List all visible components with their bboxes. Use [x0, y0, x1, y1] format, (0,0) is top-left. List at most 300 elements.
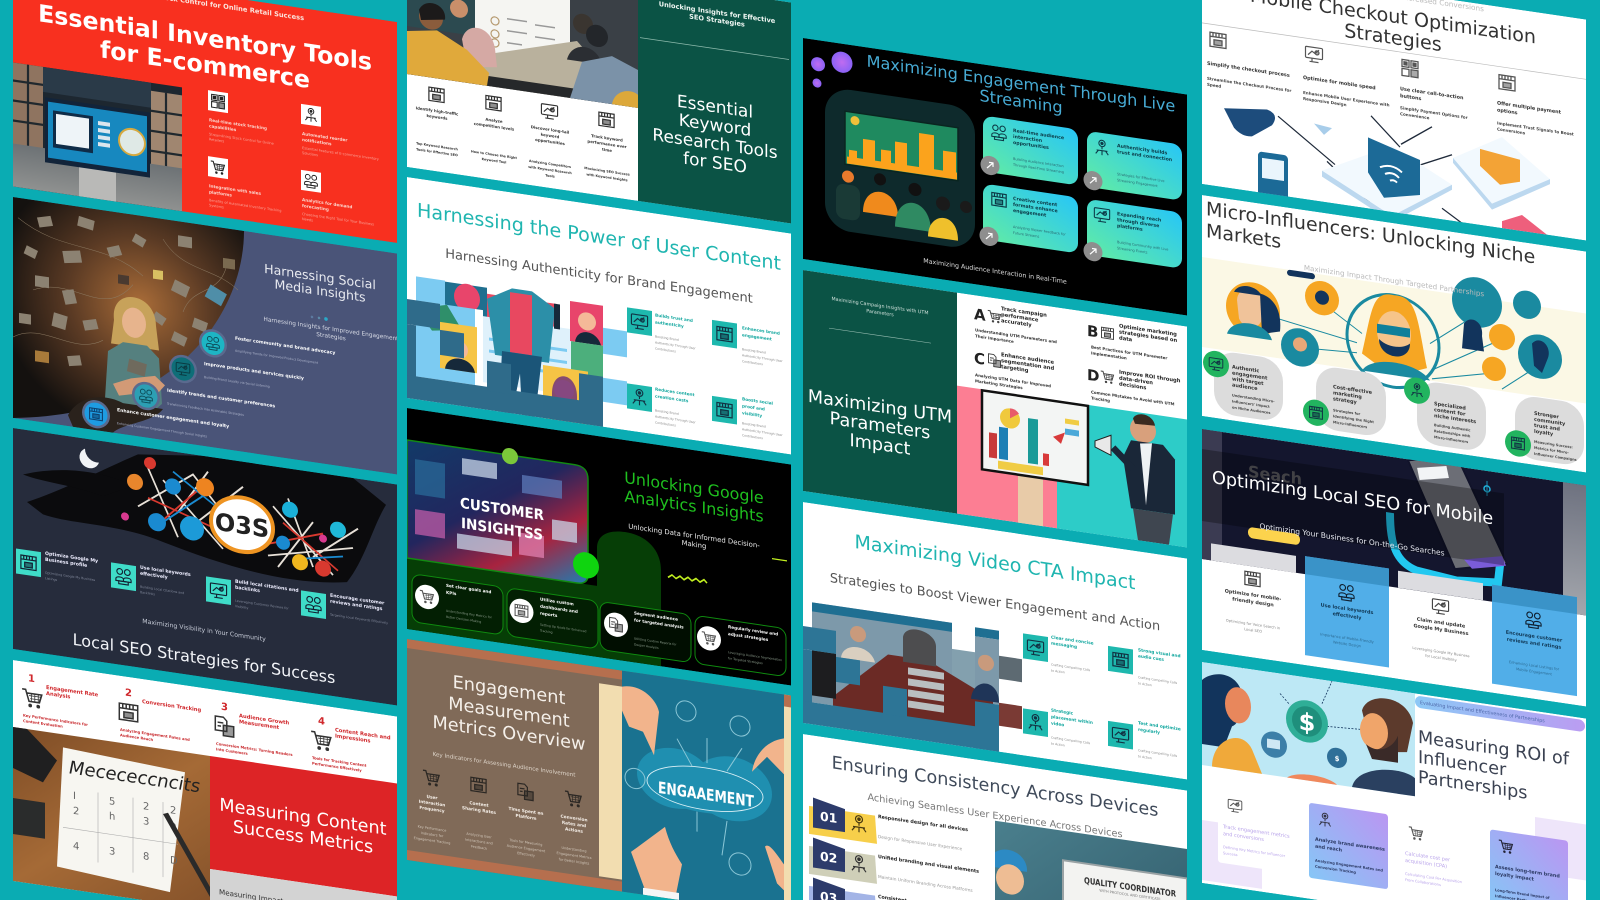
- item: reorder: notifications: [302, 137, 332, 146]
- item: stock tracking: Real-time stock tracking: [209, 117, 267, 131]
- image: metrics notepad on desk: 2: [73, 806, 79, 818]
- item: stock tracking: capabilities: [209, 123, 237, 132]
- red title block: Success Metrics: [233, 817, 373, 858]
- item: high-traffic: Tools for Effective SEO: [416, 147, 458, 157]
- panel: Unlocking Google Analytics Insights: [407, 408, 791, 685]
- item: social proof: Boosts social: [742, 396, 774, 406]
- item: stock tracking: Streamlining Stock Control for Online: [209, 132, 274, 146]
- item: reorder: Automated reorder: [302, 131, 348, 143]
- item: forecasting: forecasting: [302, 203, 329, 212]
- item: time spent: Audience Engagement: [507, 844, 546, 853]
- item: time spent: Effectively: [517, 851, 535, 858]
- item: authentic engagement: audience: [1232, 382, 1258, 392]
- item: test optimize: regularly: [1138, 727, 1160, 736]
- item: keywords: Website Design: [1333, 640, 1361, 648]
- item: CTA messaging: messaging: [1051, 640, 1077, 650]
- card: creative: Analyzing Viewer Feedback for: [1013, 225, 1066, 237]
- image: engagement hands: [622, 671, 791, 900]
- item: loyalty: [82, 400, 229, 438]
- illustration: woman, man and dollar coin: $: [1335, 754, 1340, 763]
- item: cost-effective: [1303, 363, 1386, 438]
- item: dashboards: Tracking: [539, 628, 553, 634]
- item: segments: [600, 601, 691, 663]
- subtitle: Harnessing Insights for Improved Engagement: [264, 317, 399, 343]
- item: reviews: reviews and ratings: [330, 599, 383, 612]
- image: phone search scene: Seach: [1248, 462, 1302, 489]
- card: real-time: Building Audience Interaction: [1013, 157, 1064, 168]
- item: interaction: [414, 769, 450, 845]
- row 03: [809, 877, 938, 900]
- item D: Common Mistakes to Avoid with UTM: [1091, 389, 1174, 407]
- item: simplify: Streamline the Checkout Process for: [1207, 76, 1292, 93]
- item: time spent: Tools for Measuring: [509, 838, 542, 847]
- item: loyalty: Enhancing Customer Engagement Through Social Insights: [117, 421, 207, 439]
- image: metrics notepad on desk: 3: [109, 846, 115, 858]
- item: reorder: Essential Features of E-commerce Inventory: [302, 146, 379, 161]
- left title block: Maximizing Campaign Insights with UTM: [832, 296, 928, 316]
- image: metrics notepad on desk: 4: [73, 841, 79, 853]
- item B: Best Practices for UTM Parameter: [1091, 344, 1167, 361]
- item: track performance: with Keyword Insights: [586, 172, 628, 182]
- panel side: green title: Keyword: [679, 111, 751, 141]
- item: forecasting: Needs: [302, 217, 313, 223]
- card: reach: [1084, 198, 1182, 274]
- item 1: engagement rate: Analysis: [46, 691, 70, 700]
- item: reviews: Targeting Local Keywords Effectively: [329, 612, 388, 625]
- item: authentic engagement: Authentic: [1232, 364, 1259, 374]
- subtitle: Making: [682, 539, 706, 551]
- item B: strategies based on: [1119, 329, 1177, 344]
- image: metrics notepad on desk: 2: [143, 801, 149, 813]
- item: specialized: Building Authentic: [1434, 423, 1470, 432]
- item: sharing: Feedback: [471, 844, 487, 851]
- item: strategic placement: video: [1051, 720, 1064, 728]
- item: dashboards: dashboards and: [540, 604, 578, 614]
- card: creative: [980, 183, 1078, 259]
- item: local keywords: Building Local Citations and: [140, 585, 184, 595]
- item: authentic engagement: Understanding Micro-: [1232, 393, 1275, 404]
- item D: decisions: [1119, 381, 1146, 391]
- item: payments: [1497, 74, 1574, 143]
- row 01: Responsive design for all devices: [878, 814, 968, 833]
- item A: [974, 302, 1057, 350]
- item: simplify: [1207, 32, 1292, 99]
- squiggle: [668, 543, 787, 595]
- item: citations: Leveraging Customer Reviews for: [235, 599, 289, 611]
- item 3: audience growth: Audience Growth: [239, 713, 289, 727]
- item: social proof: visibility: [742, 410, 762, 418]
- dots: [311, 315, 328, 321]
- item: competition: Analyze: [485, 117, 503, 124]
- pill subtitle: Evaluating Impact and Effectiveness of Partnerships: [1420, 700, 1545, 724]
- item: dashboards: Setting Up Goals for Enhanced: [540, 623, 587, 633]
- title: for E-commerce: [100, 35, 310, 94]
- image: metrics notepad on desk: 3: [143, 816, 149, 828]
- panel: Measuring Content Success Metrics: [13, 660, 397, 900]
- item: google profile: [16, 548, 98, 582]
- item: long-tail: with Keyword Research: [528, 165, 572, 175]
- item: engagement: Contributions: [742, 359, 763, 366]
- item A: Their Importance: [975, 333, 1014, 344]
- item: speed: Enhance Mobile User Experience with: [1303, 90, 1390, 108]
- subtitle: Harnessing Authenticity for Brand Engagement: [445, 247, 753, 307]
- title: Harnessing the Power of User Content: [417, 199, 781, 275]
- card: authenticity: trust and connection: [1117, 149, 1172, 163]
- item: strategic placement: [1023, 703, 1093, 752]
- item: specialized: [1404, 376, 1486, 453]
- item: engagement: [712, 320, 783, 369]
- item: cost-effective: Cost-effective: [1333, 384, 1373, 396]
- item: time spent: [507, 782, 546, 859]
- item: mobile-friendly: Optimizing for Voice Search in: [1226, 619, 1280, 630]
- item C: segmentation and: [1001, 358, 1054, 372]
- caption: Maximizing Audience Interaction in Real-Time: [923, 258, 1067, 286]
- illustration: influencer network: [1202, 237, 1586, 415]
- item: competition: [471, 93, 517, 166]
- title: Media Insights: [274, 277, 366, 305]
- item: advocacy: Foster community and brand advocacy: [235, 336, 335, 356]
- item: content costs: Authenticity Through User: [655, 414, 696, 425]
- item: reviews: [1492, 585, 1577, 696]
- item: conversion: Rates and: [562, 820, 586, 829]
- item A: accurately: [1001, 318, 1032, 329]
- item: test optimize: Crafting Compelling Calls: [1138, 748, 1178, 758]
- image: metrics notepad on desk: 5: [109, 796, 115, 808]
- image: customer insights dashboard: INSIGHTSS: [461, 515, 543, 544]
- item: reviews: Mobile Engagement: [1516, 667, 1552, 677]
- item: track engagement: [1202, 790, 1290, 893]
- panel: Engagement Measurement Metrics Overview: [407, 639, 791, 900]
- item 3: audience growth: Conversion Metrics: Turning Readers: [216, 742, 293, 757]
- item: specialized: Relationships with: [1434, 429, 1471, 439]
- item: goals: Better Decision-Making: [446, 615, 481, 624]
- item: social proof: proof and: [742, 403, 765, 412]
- panel side: green title: Essential: [677, 92, 753, 123]
- item: speed: Responsive Design: [1303, 96, 1347, 107]
- image: metrics notepad on desk: D: [170, 855, 178, 867]
- item: visual audio: Crafting Compelling Calls: [1138, 675, 1178, 685]
- item: visual audio: [1108, 643, 1181, 691]
- item: sharing: Interactions and: [465, 838, 493, 846]
- item: competition: How to Choose the Right: [471, 149, 517, 160]
- panel: Ensuring Consistency Across Devices: [803, 734, 1187, 900]
- title: Unlocking Google: [624, 468, 764, 507]
- item: trends: [132, 382, 275, 416]
- item 2: conversion tracking: Analyzing Engagement Rates and: [120, 728, 190, 742]
- item 1: engagement rate: Key Performance Indicators for: [23, 713, 88, 727]
- item: sharing: Sharing Rates: [462, 805, 496, 816]
- item: trust: Builds trust and: [655, 312, 693, 323]
- item: social proof: [712, 392, 783, 443]
- item: interaction: Engagement Tracking: [414, 836, 450, 845]
- item: sharing: [462, 776, 496, 852]
- illustration: woman, man and dollar coin: [1202, 657, 1415, 796]
- card: reach: Streaming Events: [1117, 246, 1148, 255]
- item: sales integration: [208, 156, 281, 218]
- item: community: Stronger: [1534, 411, 1559, 421]
- pill subtitle: [1415, 695, 1585, 732]
- item: forecasting: Analytics for demand: [302, 197, 352, 209]
- item: speed: [1303, 46, 1390, 114]
- row 02: Unified branding and visual elements: [878, 854, 979, 875]
- item: google business: Claim and update: [1417, 617, 1466, 630]
- item: analyze brand: [1309, 803, 1388, 889]
- item: loyalty impact: Long-Term Brand Impact of: [1495, 888, 1550, 900]
- item: analyze brand: Analyze brand awareness: [1315, 837, 1385, 853]
- panel side: green title: for SEO: [683, 149, 747, 178]
- item: cost per acquisition: From Collaborations: [1405, 878, 1441, 887]
- item: specialized: niche interests: [1434, 413, 1476, 425]
- item: analyze brand: and reach: [1315, 844, 1343, 854]
- row 01: 01: [820, 809, 837, 826]
- item: reviews: Enhancing Local Listings for: [1509, 660, 1560, 672]
- item: goals: [412, 574, 503, 635]
- item: analyze brand: Conversion Tracking: [1315, 865, 1356, 875]
- item 2: conversion tracking: Audience Reach: [120, 733, 153, 742]
- panel: Optimizing Local SEO for Mobile: [1202, 419, 1586, 706]
- item: keywords: Use local keywords: [1321, 602, 1373, 616]
- item: content costs: Boosting Brand: [655, 408, 679, 416]
- panel: Maximizing Engagement Through Live Streaming: [803, 38, 1187, 315]
- image: metrics notepad on desk: b: [170, 820, 176, 832]
- card: creative: formats enhance: [1013, 202, 1058, 214]
- cream column: [599, 683, 622, 880]
- card: authenticity: Strategies for Effective Live: [1117, 172, 1165, 183]
- item: dashboards: [507, 588, 598, 649]
- panel: Essential Inventory Tools for E-commerce: [13, 0, 397, 243]
- subtitle: Optimizing Your Business for On-the-Go Searches: [1259, 521, 1445, 558]
- card: real-time: Through Real-Time Streaming: [1012, 163, 1064, 174]
- item: CTA: Simplify Payment Options for: [1400, 105, 1469, 120]
- item: visual audio: to Action: [1138, 681, 1152, 687]
- item: test optimize: to Action: [1138, 754, 1152, 760]
- item: improve products: [169, 354, 304, 388]
- item: review: Regularly review and: [728, 624, 778, 637]
- item D: data-driven: [1119, 375, 1153, 386]
- title: Engagement: [453, 672, 565, 709]
- item 1: engagement rate: Content Evaluation: [23, 719, 63, 729]
- red title block: [210, 756, 397, 896]
- item: content costs: Contributions: [655, 420, 676, 428]
- item: goals: Set clear goals and: [446, 583, 491, 594]
- subtitle: Key Indicators for Assessing Audience Involvement: [433, 752, 576, 779]
- item: cost-effective: strategy: [1333, 396, 1357, 406]
- item: local keywords: effectively: [140, 571, 168, 581]
- image: woman surrounded by photos: [13, 197, 244, 452]
- item: community: community: [1534, 417, 1566, 427]
- title: Partnerships: [1418, 768, 1527, 804]
- item: google business: for Local Visibility: [1425, 654, 1458, 663]
- item: strategic placement: placement within: [1051, 714, 1093, 726]
- item 3: audience growth: 3: [221, 702, 228, 714]
- panel: Essential Keyword Research Tools: [407, 0, 791, 223]
- item: community: Measuring Success:: [1534, 440, 1573, 450]
- item: sharing: Content: [469, 800, 489, 809]
- item: local keywords: Backlinks: [140, 590, 155, 596]
- green band: [407, 500, 661, 666]
- left title block: [803, 270, 957, 514]
- item C: C: [974, 349, 985, 369]
- item: dashboards: Utilize custom: [540, 597, 574, 607]
- item: social proof: Contributions: [742, 433, 763, 440]
- panel: Maximizing UTM Parameters Impact: [803, 270, 1187, 547]
- item: trust: Authenticity Through User: [655, 340, 696, 351]
- item 4: content reach: 4: [318, 716, 325, 728]
- item: authentic engagement: engagement: [1232, 370, 1268, 382]
- left title block: Maximizing UTM: [808, 387, 952, 428]
- item B: B: [1087, 322, 1098, 341]
- item: conversion: Actions: [565, 826, 583, 835]
- item B: data: [1119, 335, 1133, 343]
- item: high-traffic: Identify high-traffic: [416, 105, 459, 117]
- item: long-tail: Analyzing Competitors: [529, 159, 571, 169]
- item 3: audience growth: Measurement: [239, 719, 280, 731]
- decorative stripes: [407, 639, 622, 892]
- item: cost-effective: Identifying the Right: [1333, 414, 1374, 424]
- item: cost per acquisition: acquisition (CPA): [1405, 858, 1447, 870]
- item: content costs: creation costs: [655, 393, 689, 403]
- title: Micro-Influencers: Unlocking Niche: [1206, 197, 1535, 268]
- item 3: audience growth: Into Customers: [216, 747, 249, 756]
- panel side: green title: Research Tools: [652, 125, 778, 163]
- item: authentic engagement: with target: [1232, 376, 1264, 387]
- row 01: [809, 797, 968, 857]
- item: google business: [1398, 571, 1483, 666]
- item: segments: for targeted analysis: [634, 617, 684, 630]
- item: authentic engagement: Influencers' Impact: [1232, 399, 1270, 409]
- title: Streaming: [979, 86, 1063, 117]
- yellow pill: [1248, 527, 1300, 545]
- title: Metrics Overview: [432, 712, 586, 755]
- item: competition: Keyword Tool: [482, 157, 506, 165]
- panel: Harnessing the Power of User Content: [407, 177, 791, 454]
- subtitle: Achieving Seamless User Experience Across Devices: [867, 792, 1123, 840]
- item: loyalty: Enhance customer engagement and loyalty: [117, 407, 229, 430]
- item: content costs: [627, 382, 696, 431]
- item: community: trust and: [1534, 423, 1560, 433]
- item D: D: [1087, 366, 1099, 386]
- item: track performance: [584, 110, 630, 183]
- item: community: Influencer Campaigns: [1534, 452, 1577, 462]
- item: citations: Build local citations and: [235, 579, 299, 594]
- item: authentic engagement: on Niche Audiences: [1232, 405, 1271, 415]
- item: CTA messaging: to Action: [1051, 668, 1065, 674]
- row 02: [809, 837, 979, 899]
- item: sales integration: Benefits of Automated Inventory Tracking: [209, 198, 281, 213]
- item: time spent: Time Spent on: [509, 806, 543, 817]
- item: cost per acquisition: Calculate cost per: [1405, 851, 1451, 864]
- item A: Track campaign: [1001, 306, 1047, 319]
- item 2: conversion tracking: Conversion Tracking: [142, 699, 201, 714]
- image: engagement hands: ENGAAEMENT: [658, 778, 754, 811]
- item 4: content reach: Content Reach and: [335, 727, 391, 742]
- item: keywords: effectively: [1333, 611, 1362, 622]
- item: google profile: Optimizing Google My Business: [45, 571, 96, 582]
- title: Maximizing Engagement Through Live: [867, 51, 1175, 116]
- item: trends: Identify trends and customer preferences: [167, 388, 275, 410]
- item: trust: authenticity: [655, 319, 684, 329]
- item: reorder: [301, 104, 379, 166]
- item: google business: Leveraging Google My Business: [1412, 646, 1470, 658]
- item: specialized: Micro-Influencers: [1434, 435, 1468, 444]
- item 3: audience growth: [214, 702, 292, 756]
- item: interaction: Frequency: [419, 805, 445, 815]
- left title block: Parameters: [830, 409, 930, 444]
- item: time spent: Platform: [516, 813, 537, 822]
- item 2: conversion tracking: [118, 688, 201, 742]
- item: social proof: Boosting Brand: [742, 421, 766, 429]
- item: authentic engagement: [1203, 348, 1283, 423]
- item: review: adjust strategies: [728, 631, 769, 642]
- item: simplify: Speed: [1207, 82, 1221, 89]
- item D: [1087, 365, 1181, 414]
- item: sharing: Analyzing User: [466, 832, 492, 840]
- item: CTA messaging: Clear and concise: [1051, 634, 1094, 647]
- item: citations: backlinks: [235, 585, 260, 594]
- item: cost per acquisition: [1405, 826, 1462, 890]
- item: local keywords: [111, 562, 190, 596]
- item: segments: Utilizing Custom Reports for: [634, 636, 677, 647]
- title: Maximizing Video CTA Impact: [854, 530, 1136, 594]
- item: mobile-friendly: Local SEO: [1244, 627, 1262, 634]
- item: advocacy: [199, 329, 336, 364]
- subtitle: Maximizing Impact Through Targeted Partnerships: [1304, 263, 1484, 299]
- title: Measurement: [448, 693, 570, 732]
- item: review: [695, 615, 786, 677]
- item: review: Leveraging Audience Segmentation: [728, 650, 782, 662]
- item A: performance: [1001, 312, 1039, 324]
- item: specialized: Specialized: [1434, 401, 1466, 412]
- item: interaction: Indicators for: [421, 831, 444, 838]
- card: authenticity: Authenticity builds: [1117, 143, 1168, 157]
- title: Essential Inventory Tools: [38, 0, 372, 76]
- item: visual audio: audio cues: [1138, 653, 1164, 663]
- item 4: content reach: Tools for Tracking Content: [312, 756, 367, 768]
- card: creative: Creative content: [1013, 196, 1058, 208]
- item D: Improve ROI through: [1119, 369, 1181, 385]
- item: mobile-friendly: friendly design: [1232, 596, 1274, 609]
- item: trust: [627, 307, 696, 357]
- item: simplify: Simplify the checkout process: [1207, 61, 1290, 79]
- item: payments: options: [1497, 107, 1518, 116]
- item: conversion: Conversion: [561, 814, 587, 824]
- title: Harnessing Social: [264, 261, 376, 292]
- image: metrics notepad on desk: Mecececcncits: [69, 757, 201, 798]
- title: Analytics Insights: [624, 487, 764, 526]
- decorative circles: [811, 47, 852, 93]
- item C: Enhance audience: [1001, 352, 1055, 366]
- item: social proof: Authenticity Through User: [742, 427, 783, 437]
- item: track performance: Track keyword: [591, 133, 623, 143]
- image: quality coordinator certificate: [991, 820, 1187, 900]
- item: google business: Google My Business: [1413, 623, 1469, 637]
- card: reach: platforms: [1117, 223, 1143, 233]
- card: real-time: [980, 115, 1078, 188]
- item 1: engagement rate: 1: [28, 673, 35, 685]
- card: reach: through diverse: [1117, 217, 1159, 229]
- item: track engagement: and conversions: [1223, 831, 1264, 843]
- image: customer insights dashboard: CUSTOMER: [460, 495, 544, 524]
- item: community: Metrics for Micro-: [1534, 446, 1569, 455]
- item: CTA messaging: Crafting Compelling Calls: [1051, 662, 1091, 672]
- item: improve products: Building Brand Loyalty via Social Listening: [204, 375, 270, 389]
- item: speed: Optimize for mobile speed: [1303, 75, 1376, 92]
- image: metrics notepad on desk: 2: [170, 805, 176, 817]
- item: citations: Visibility: [235, 604, 248, 610]
- card: real-time: opportunities: [1013, 140, 1049, 151]
- card: authenticity: [1084, 130, 1182, 203]
- image: boardroom: [803, 601, 1022, 755]
